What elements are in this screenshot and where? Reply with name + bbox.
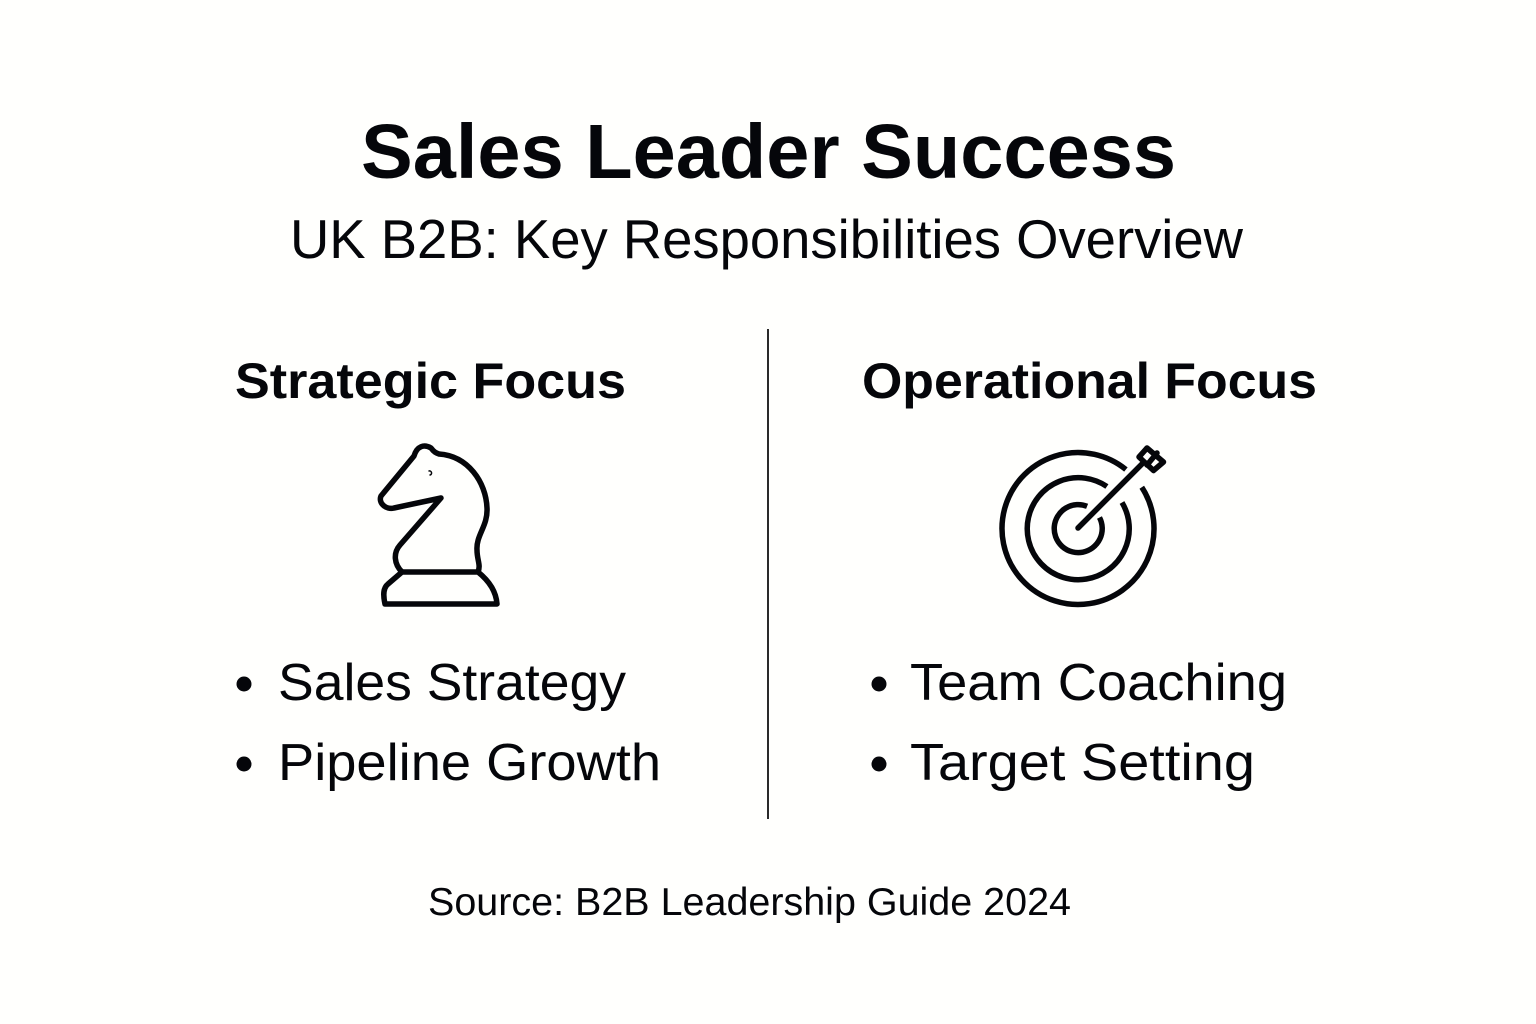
panel: strategic focus xyxy=(235,353,661,792)
icon: target with arrow xyxy=(1002,448,1164,605)
icon: chess knight xyxy=(380,446,497,604)
item: sales strategy: Sales Strategy xyxy=(278,654,626,712)
panel: operational focus xyxy=(862,353,1317,792)
bullet: target setting xyxy=(872,756,886,772)
source note: Source: B2B Leadership Guide 2024 xyxy=(428,881,1071,924)
heading: strategic focus: Strategic Focus xyxy=(235,353,626,409)
bullet: pipeline growth xyxy=(236,756,252,772)
item: target setting: Target Setting xyxy=(910,734,1255,792)
list: operational items xyxy=(872,654,1287,792)
heading: operational focus: Operational Focus xyxy=(862,353,1317,409)
bullet: sales strategy xyxy=(236,676,252,692)
subtitle: UK B2B: Key Responsibilities Overview xyxy=(290,208,1243,270)
item: team coaching: Team Coaching xyxy=(910,654,1287,712)
item: pipeline growth: Pipeline Growth xyxy=(278,734,661,792)
list: strategic items xyxy=(236,654,661,792)
center divider xyxy=(767,329,769,819)
bullet: team coaching xyxy=(872,676,886,692)
title: Sales Leader Success xyxy=(361,109,1176,195)
